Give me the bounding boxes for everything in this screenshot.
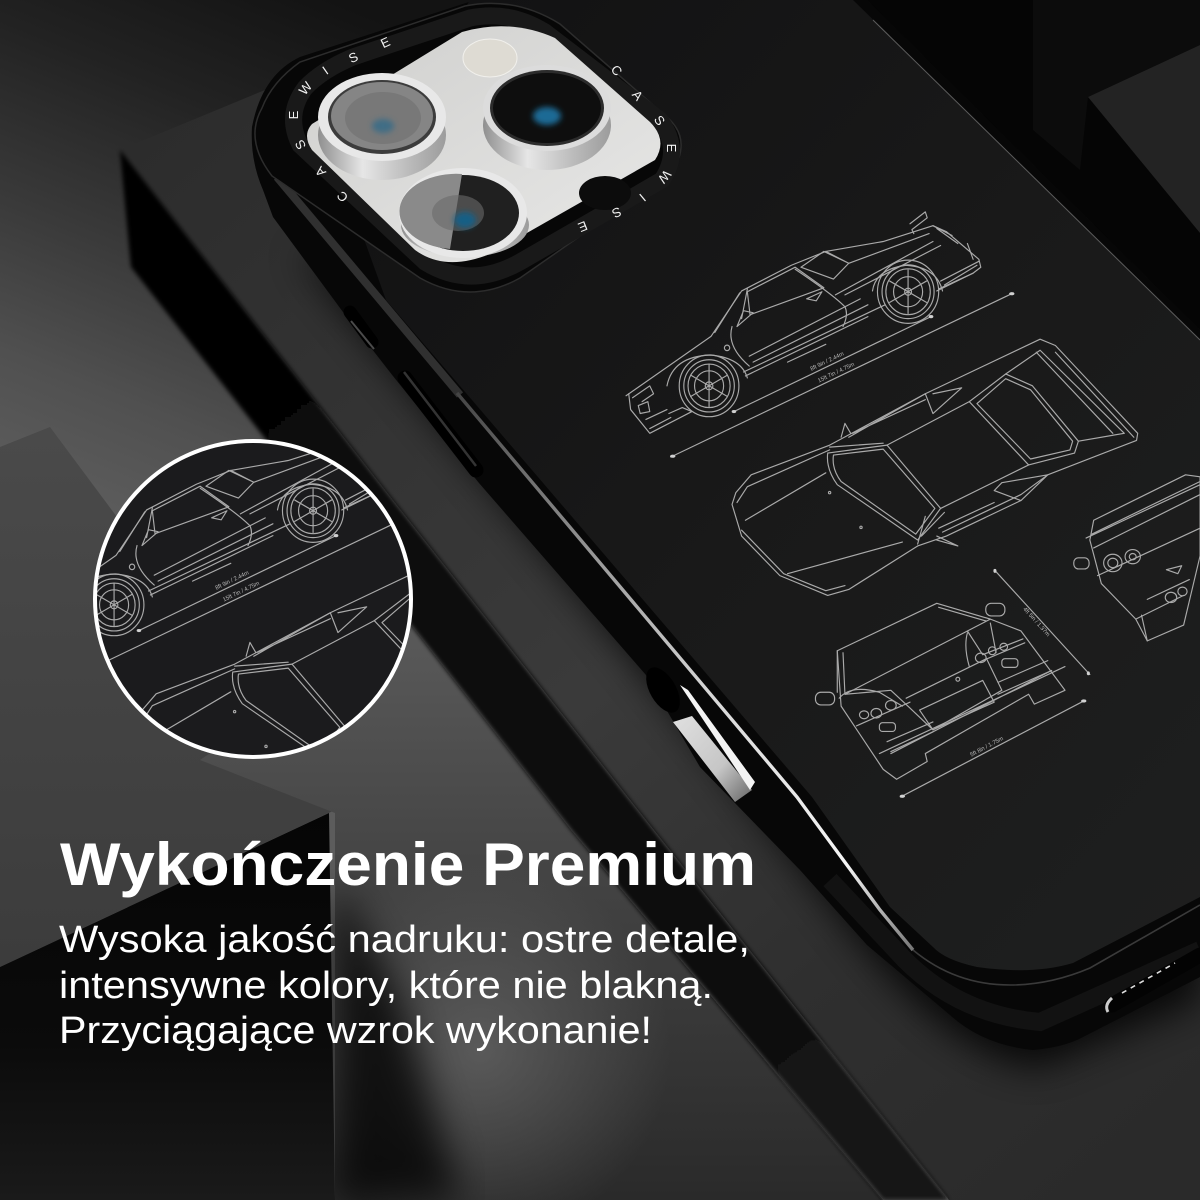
- description text: [59, 919, 750, 1052]
- brand ring text: I: [636, 191, 649, 205]
- brand ring text: E: [378, 34, 393, 51]
- side view dimension arrows: 15ft 7in / 4.75m: [817, 362, 856, 385]
- front view dimension arrows: 5ft 8in / 1.75m: [969, 736, 1005, 759]
- brand ring text: C: [334, 188, 351, 205]
- brand ring text: C: [608, 62, 625, 79]
- charging port: [1107, 955, 1200, 1012]
- phone side reflections: [277, 177, 1200, 1022]
- rear view car: [1074, 475, 1200, 641]
- flash: [463, 39, 517, 77]
- brand ring text: E: [286, 110, 301, 119]
- phone gloss edge: [457, 20, 1200, 985]
- description text: Wysoka jakość nadruku: ostre detale,: [59, 919, 750, 961]
- title: Wykończenie Premium: [60, 831, 756, 898]
- front view dimension arrows: 4ft 5in / 1.37m: [1021, 606, 1051, 638]
- lens: top right: [483, 65, 611, 170]
- description text: intensywne kolory, które nie blakną.: [59, 965, 713, 1007]
- front view dimension arrows: [900, 569, 1090, 798]
- brand ring text: S: [346, 49, 361, 66]
- lens: top left: [318, 73, 446, 180]
- brand ring text: S: [609, 204, 624, 221]
- lens: bottom: [399, 168, 529, 258]
- brand ring text: A: [629, 87, 646, 104]
- camera module: [255, 3, 681, 292]
- side view dimension arrows: [670, 292, 1014, 458]
- brand ring text: E: [664, 144, 679, 153]
- brand ring text: S: [651, 112, 668, 128]
- brand ring text: S: [292, 137, 309, 152]
- blueprint car drawings: [626, 212, 1200, 798]
- microphone hole: [579, 176, 631, 210]
- side view dimension arrows: 8ft 9in / 2.44m: [810, 351, 845, 373]
- side view car: [626, 212, 981, 433]
- brand ring text: [286, 34, 679, 235]
- front view car: [815, 603, 1065, 779]
- camera bezel: [255, 3, 681, 292]
- brand ring text: A: [312, 163, 329, 180]
- magnifier circle callout: [93, 439, 413, 759]
- brand ring text: I: [320, 63, 331, 78]
- bezel lettering band: [294, 16, 672, 276]
- top view car: [732, 339, 1138, 595]
- description text: Przyciągające wzrok wykonanie!: [59, 1010, 652, 1052]
- phone back plate: [350, 0, 1200, 970]
- brand ring text: W: [654, 167, 674, 187]
- phone shadow: [296, 250, 1200, 1068]
- camera glass window: [307, 26, 660, 262]
- phone body: [252, 0, 1200, 1050]
- phone side buttons: [350, 312, 755, 802]
- brand ring text: E: [576, 218, 590, 235]
- brand ring text: W: [296, 78, 316, 98]
